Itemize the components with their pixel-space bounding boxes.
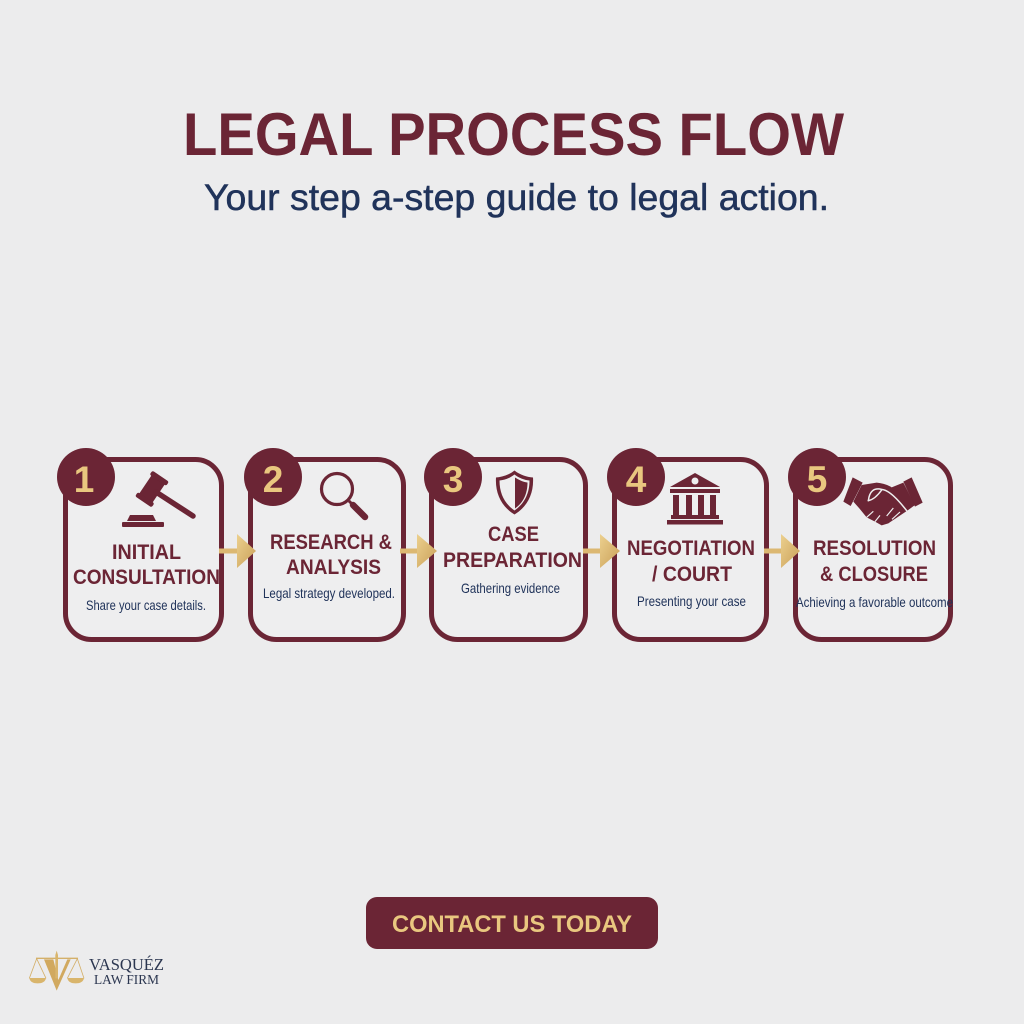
heading xyxy=(443,523,582,572)
icon: scales of justice xyxy=(29,951,84,991)
heading: NEGOTIATION xyxy=(627,537,755,560)
number badge 2: 2 xyxy=(263,459,283,500)
number badge 3 xyxy=(424,448,482,506)
icon: courthouse xyxy=(667,473,723,524)
description: Achieving a favorable outcome xyxy=(796,594,953,610)
logo: Vasquez Law Firm xyxy=(29,951,164,991)
icon: gavel xyxy=(122,471,193,527)
number badge 1 xyxy=(57,448,115,506)
button: contact us today xyxy=(366,897,658,949)
title: LEGAL PROCESS FLOW xyxy=(183,101,844,168)
heading: RESOLUTION xyxy=(813,537,936,560)
heading xyxy=(627,537,755,586)
panel: step 1 initial consultation xyxy=(57,448,222,640)
icon: handshake xyxy=(843,477,923,525)
heading: PREPARATION xyxy=(443,549,582,572)
subtitle: Your step a-step guide to legal action. xyxy=(204,177,829,218)
heading xyxy=(813,537,936,586)
heading: RESEARCH & xyxy=(270,531,392,554)
heading: INITIAL xyxy=(112,541,181,564)
number badge 1: 1 xyxy=(74,459,94,500)
heading: & CLOSURE xyxy=(820,563,928,586)
wordmark: LAW FIRM xyxy=(94,972,159,987)
icon: shield xyxy=(496,470,533,514)
number badge 2 xyxy=(244,448,302,506)
panel: step 5 resolution and closure xyxy=(788,448,953,640)
heading: ANALYSIS xyxy=(286,556,381,579)
panel: step 3 case preparation xyxy=(424,448,586,640)
description: Share your case details. xyxy=(86,597,206,613)
arrow: step 4 to 5 xyxy=(764,534,800,568)
arrow: step 1 to 2 xyxy=(219,534,256,568)
arrow: step 3 to 4 xyxy=(583,534,620,568)
heading: CASE xyxy=(488,523,539,546)
description: Legal strategy developed. xyxy=(263,585,395,601)
heading: CONSULTATION xyxy=(73,566,220,589)
heading xyxy=(270,531,392,579)
number badge 5 xyxy=(788,448,846,506)
wordmark xyxy=(89,955,164,987)
number badge 5: 5 xyxy=(807,459,827,500)
panel: step 2 research and analysis xyxy=(244,448,404,640)
wordmark: VASQUÉZ xyxy=(89,955,164,974)
description: Presenting your case xyxy=(637,593,746,609)
panel: step 4 negotiation or court xyxy=(607,448,766,640)
icon: magnifying glass xyxy=(322,474,365,517)
arrow: step 2 to 3 xyxy=(400,534,437,568)
heading xyxy=(73,541,220,589)
description: Gathering evidence xyxy=(461,580,560,596)
number badge 3: 3 xyxy=(443,459,463,500)
button: contact us today: CONTACT US TODAY xyxy=(392,911,632,938)
number badge 4 xyxy=(607,448,665,506)
number badge 4: 4 xyxy=(626,459,647,500)
heading: / COURT xyxy=(652,563,732,586)
